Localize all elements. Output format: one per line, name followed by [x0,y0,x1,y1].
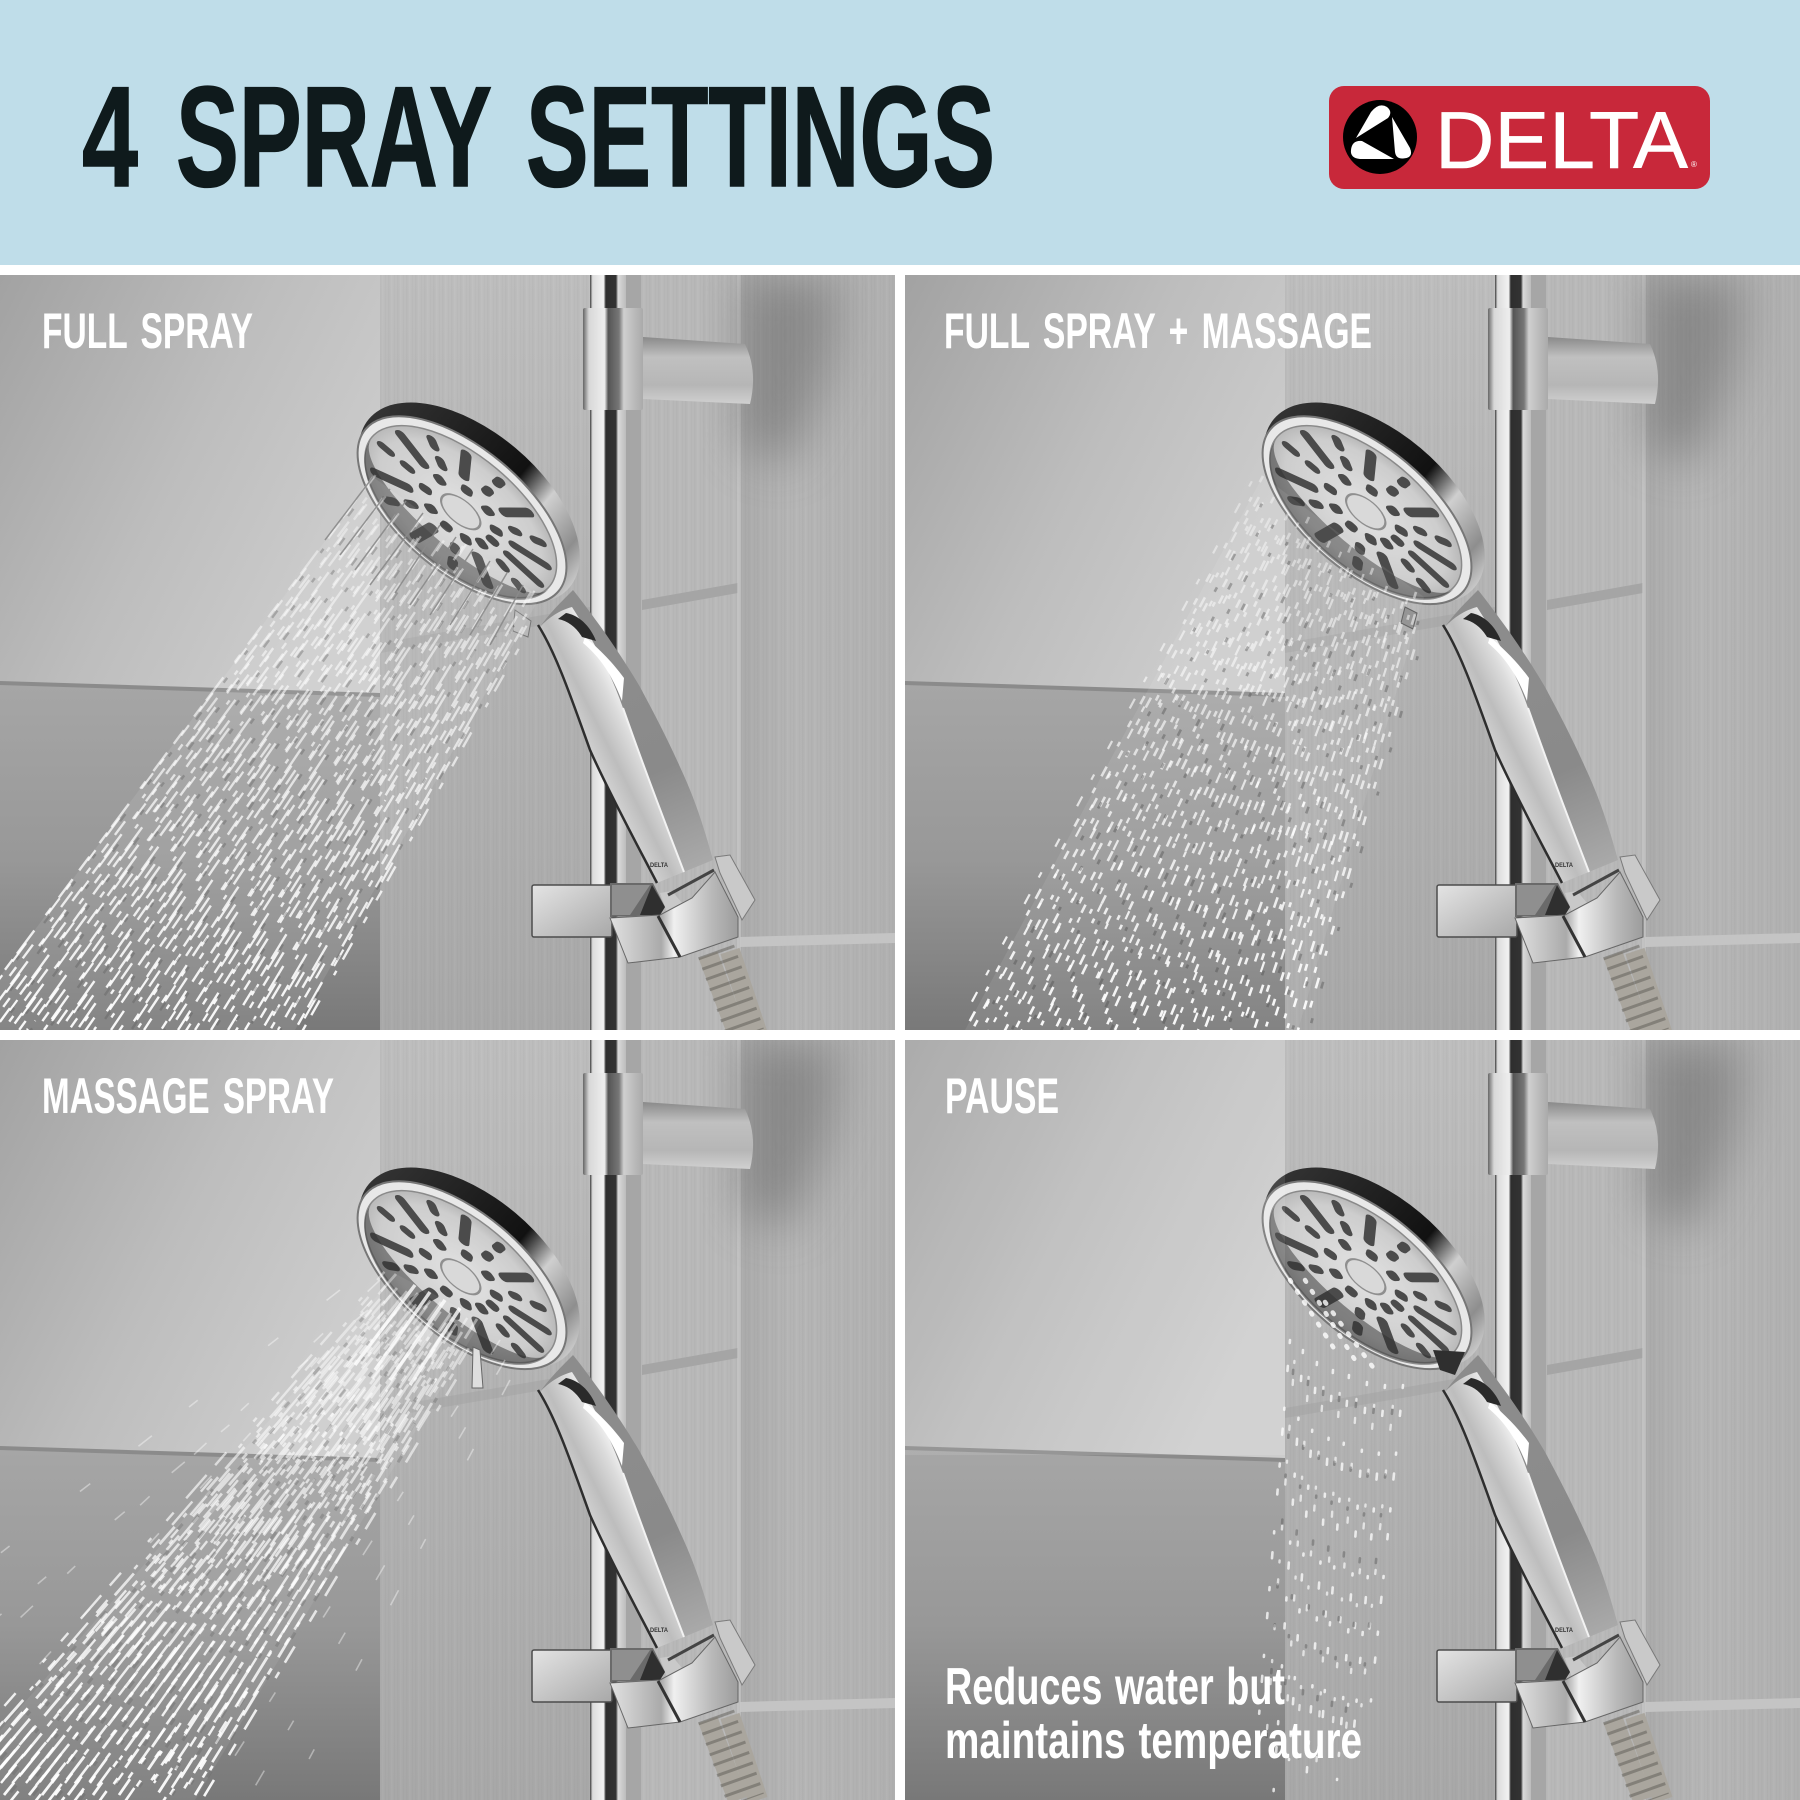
spray selector trigger [1433,1350,1465,1375]
Delta logo: ® [1691,160,1697,169]
water spray [0,1262,510,1800]
Delta logo [1329,86,1710,189]
title: 4 [82,58,138,217]
label: Full Spray: FULL SPRAY [42,303,253,359]
shower scene [0,1040,895,1800]
water spray [0,468,540,1041]
shower scene [905,275,1800,1035]
title: SPRAY [176,58,492,217]
spray selector trigger [472,1347,483,1388]
label: Massage Spray: MASSAGE SPRAY [42,1068,334,1124]
spray selector trigger [513,610,531,637]
title: SETTINGS [526,58,995,217]
water spray [961,468,1424,1041]
header band [0,0,1800,265]
shower scene [905,1040,1800,1800]
panel: massage spray [0,1040,895,1800]
Delta logo: DELTA [1435,96,1688,186]
lighter wall tone [905,1040,1285,1455]
caption: pause description [945,1658,1362,1770]
label: Pause: PAUSE [945,1068,1059,1124]
shower scene [0,275,895,1035]
dripping water [1257,1280,1403,1800]
panel: full spray [0,275,895,1030]
label: Full Spray + Massage: FULL SPRAY + MASSAGE [944,303,1372,359]
caption: pause description: Reduces water but [945,1658,1285,1716]
panel: full spray + massage [905,275,1800,1030]
spray selector trigger [1401,607,1417,629]
panel: pause [905,1040,1800,1800]
caption: pause description: maintains temperature [945,1712,1362,1770]
icon: Delta emblem [1343,100,1417,174]
